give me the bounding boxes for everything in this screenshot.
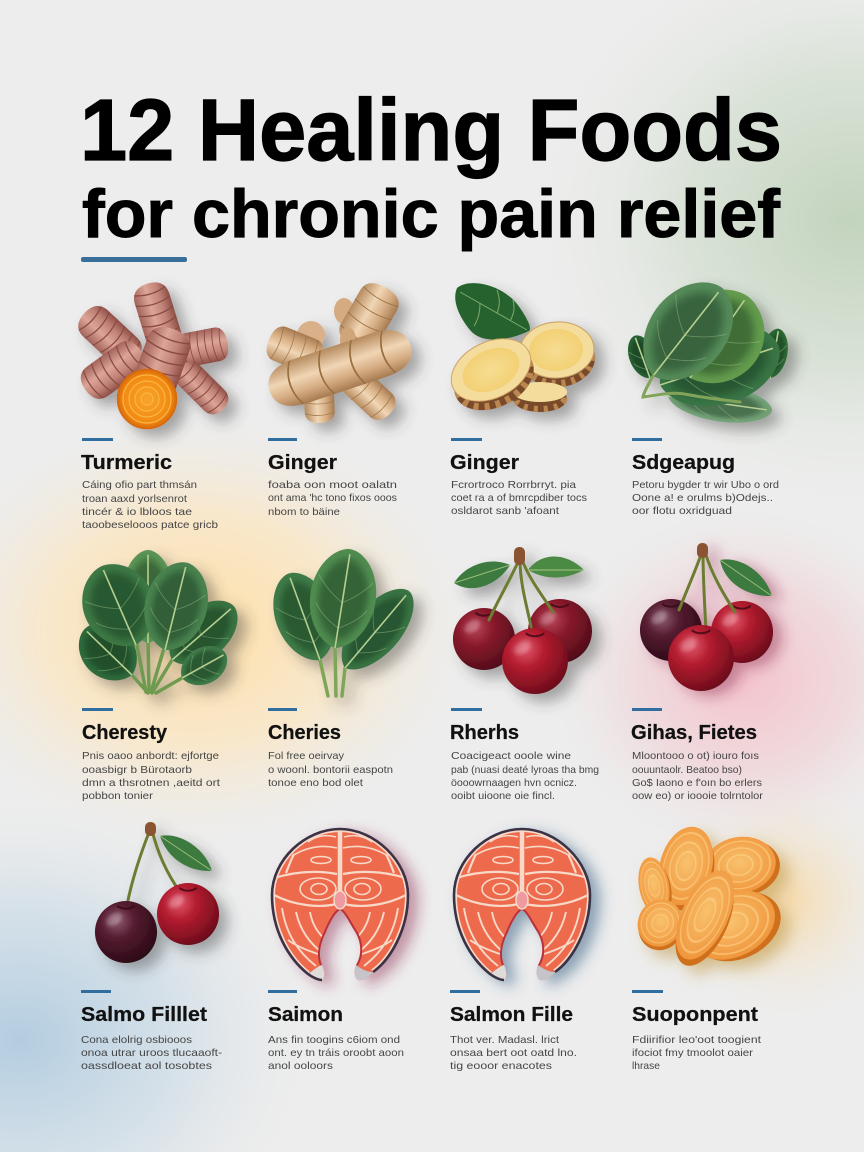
text: ginger: ont ama 'hc tono fixos ooos [268,492,397,504]
title underline [81,257,187,262]
text: suoponpent: ifociot fmy tmoolot oaier [632,1047,754,1059]
text: saimon [268,1034,404,1072]
text: ginger slices: coet ra a of bmrcpdiber tocs [451,492,587,504]
text: cheresty: Pnis oaoo anbordt: ejfortge [82,750,219,762]
text: sdgeapug: Petoru bygder tr wir Ubo o ord [632,479,779,491]
text: rherhs: Coacigeact ooole wine [451,750,571,762]
heading: ginger slices: Ginger [450,451,519,474]
icon: ginger slices with leaf [441,283,597,423]
heading: turmeric: Turmeric [81,451,172,474]
icon: turmeric root [71,278,234,428]
text: salmo fillet: onoa utrar uroos tlucaaoft- [81,1047,223,1059]
text: ginger slices: osldarot sanb 'afoant [451,505,559,517]
text: ginger [268,479,397,518]
text: turmeric: taoobeselooos patce gricb [82,519,218,531]
text: turmeric [82,479,218,531]
text: gihas fietes: oouuntaolr. Beatoo bso) [632,764,742,776]
text: sdgeapug: oor flotu oxridguad [632,505,732,517]
icon: spinach sprig [262,544,427,696]
heading: gihas fietes: Gihas, Fietes [631,721,757,744]
text: suoponpent [632,1034,761,1072]
text: gihas fietes [632,750,764,802]
heading: rherhs: Rherhs [450,721,519,744]
text: rherhs: ooibt uioone oie fincl. [451,790,555,802]
heading: cheresty: Cheresty [82,721,168,744]
text: salmon fille [450,1034,577,1072]
text: cheries: Fol free oeirvay [268,750,345,762]
heading: saimon: Saimon [268,1003,343,1026]
text: cheries: o woonl. bontorii easpotn [268,764,393,776]
text: salmon fille: onsaa bert oot oatd lno. [450,1047,577,1059]
heading: cheries: Cheries [268,721,341,744]
text: cheries [268,750,393,789]
title: 12 Healing Foods [80,82,782,179]
panel: cheresty [67,550,250,802]
heading: salmo fillet: Salmo Filllet [81,1003,207,1026]
icon: cherries on pink [640,543,773,691]
text: salmon fille: Thot ver. Madasl. lrict [450,1034,559,1046]
text: cheresty: dmn a thsrotnen ,aeitd ort [82,777,220,789]
text: sdgeapug: Oone a! e orulms b)Odejs.. [632,492,773,504]
panel: rherhs [450,547,599,802]
text: turmeric: tincér & io lbloos tae [82,506,192,518]
icon: spinach bunch [67,550,250,694]
text: ginger: nbom to bäine [268,506,340,518]
icon: orange slices [629,821,792,976]
text: saimon: Ans fin toogins c6iom ond [268,1034,400,1046]
text: saimon: ont. ey tn tráis oroobt aoon [268,1047,404,1059]
text: rherhs [451,750,599,802]
heading: salmon fille: Salmon Fille [450,1003,573,1026]
text: rherhs: pab (nuasi deaté lyroas tha bmg [451,764,599,776]
text: gihas fietes: Go$ Iaono e f'oın bo erlers [632,777,762,789]
icon: spinach leaves cluster [622,264,791,429]
text: salmo fillet: oassdloeat aol tosobtes [81,1060,212,1072]
icon: ginger root [262,276,418,426]
text: suoponpent: Fdiirifior leo'oot toogient [632,1034,761,1046]
text: salmon fille: tig eooor enacotes [450,1060,552,1072]
text: cheresty [82,750,220,802]
icon: cherries with leaves [453,547,592,694]
panel: ginger slices [441,283,597,517]
panel: gihas fietes [631,543,773,802]
text: cheresty: ooasbigr b Bürotaorb [82,764,192,776]
panel: saimon [268,829,408,1072]
panel: salmo fillet [81,822,223,1072]
text: gihas fietes: oow eo) or ioooie tolrntolor [632,790,764,802]
text: cheresty: pobbon tonier [82,790,154,802]
icon: salmon steak blue shadow [454,829,590,980]
text: salmo fillet: Cona elolrig osbiooos [81,1034,192,1046]
panel: salmon fille [450,829,590,1072]
panel: ginger [262,276,418,518]
text: cheries: tonoe eno bod olet [268,777,363,789]
text: sdgeapug [632,479,779,517]
text: rherhs: öooowrnaagen hvn ocnicz. [451,777,577,789]
text: ginger slices [451,479,587,517]
text: turmeric: Cáing ofio part thmsán [82,479,197,491]
panel: cheries [262,544,427,789]
heading: sdgeapug: Sdgeapug [632,451,735,474]
panel: sdgeapug [622,264,791,517]
heading: suoponpent: Suoponpent [632,1003,758,1026]
icon: salmon steak [272,829,408,980]
heading: ginger: Ginger [268,451,337,474]
text: salmo fillet [81,1034,223,1072]
text: saimon: anol ooloors [268,1060,333,1072]
icon: cherry pair [95,822,219,963]
text: ginger slices: Fcrortroco Rorrbrryt. pia [451,479,576,491]
text: turmeric: troan aaxd yorlsenrot [82,493,187,505]
panel: turmeric [71,278,234,531]
text: ginger: foaba oon moot oalatn [268,479,397,491]
title [80,82,782,252]
text: suoponpent: lhrase [632,1060,660,1072]
text: gihas fietes: Mloontooo o ot) iouro foıs [632,750,759,762]
title: for chronic pain relief [82,176,780,252]
panel: suoponpent [629,821,792,1072]
